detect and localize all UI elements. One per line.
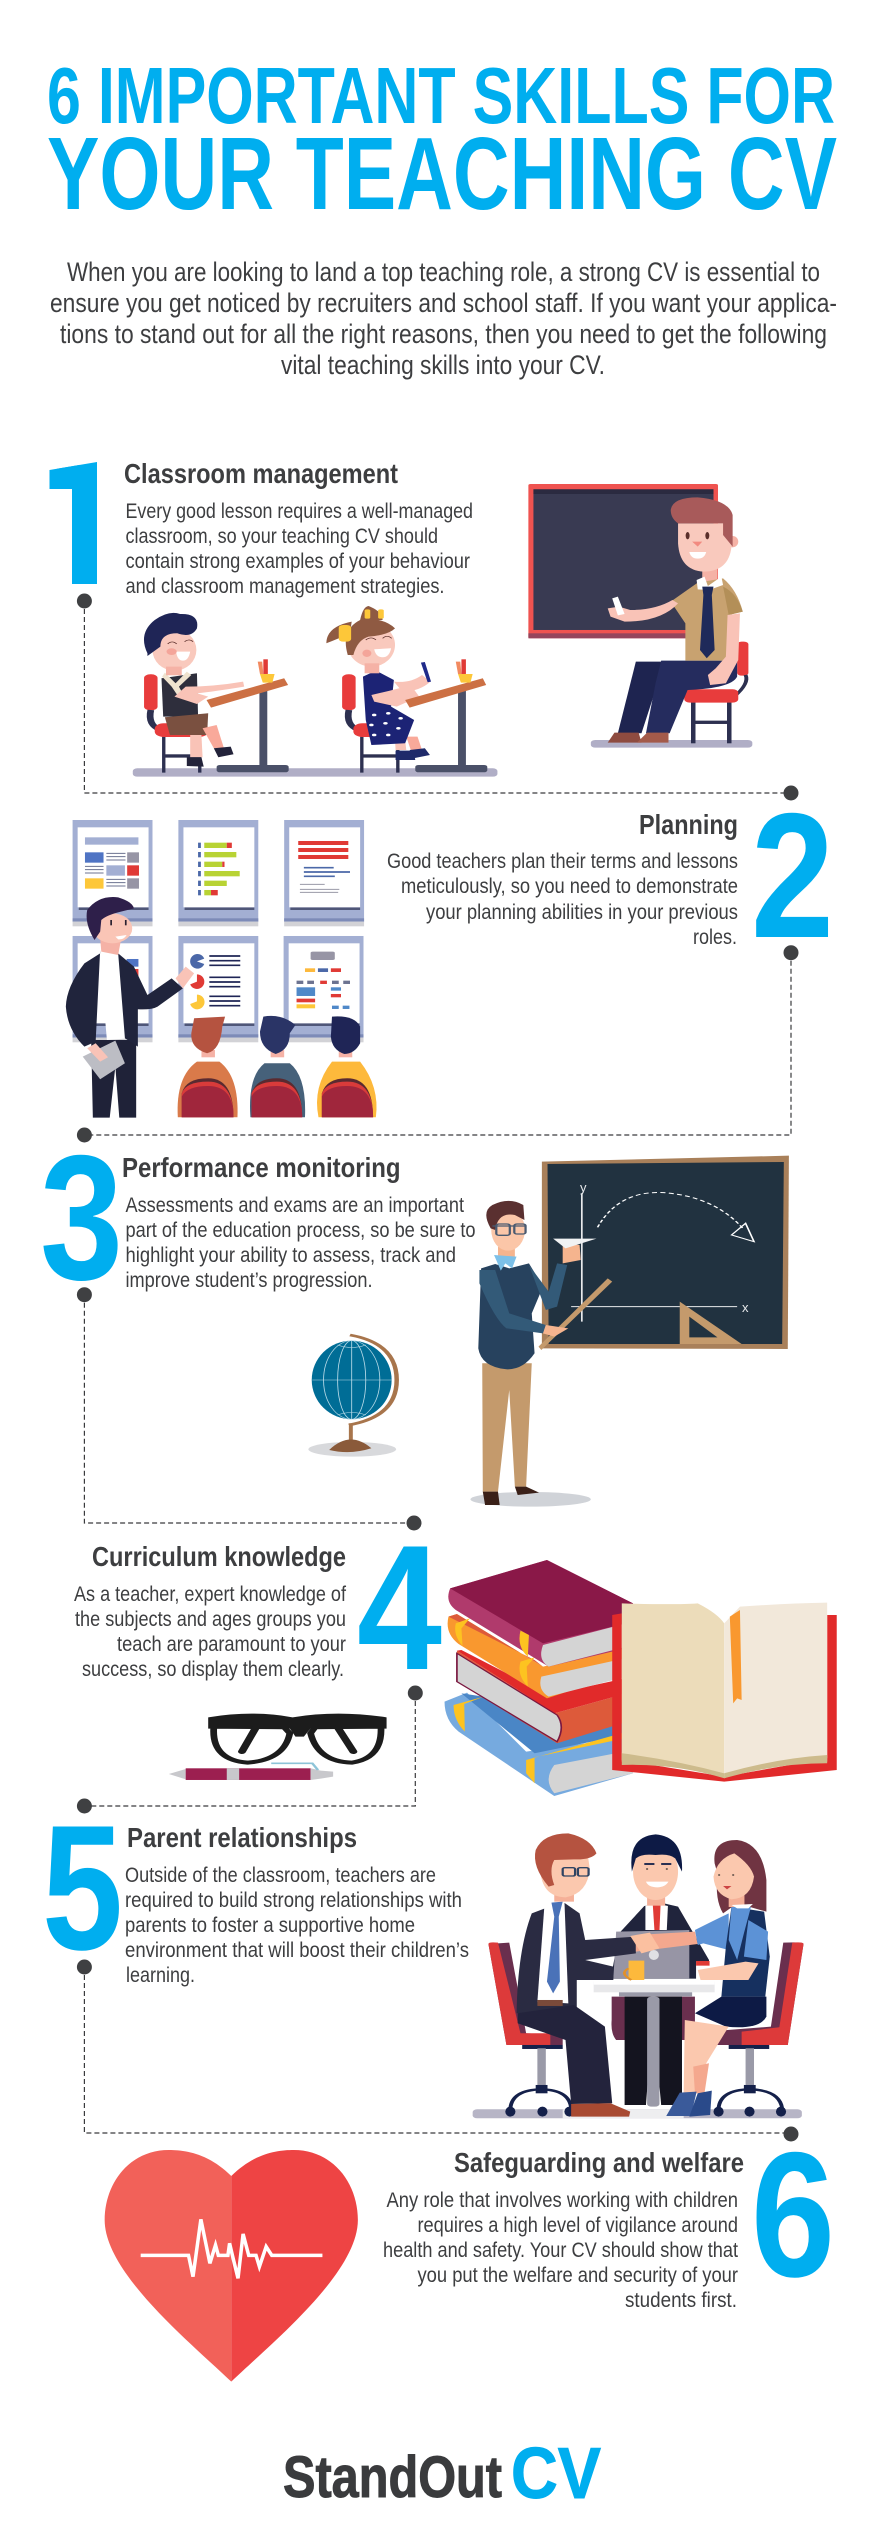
heading: curriculum knowledge: Curriculum knowledge xyxy=(92,1541,346,1572)
heading: planning: Planning xyxy=(639,809,738,840)
body text: curriculum knowledge: teach are paramount to your xyxy=(117,1633,346,1656)
body text: curriculum knowledge: success, so display them clearly. xyxy=(82,1658,344,1681)
intro paragraph xyxy=(50,257,837,380)
panel: safeguarding and welfare xyxy=(105,2115,835,2382)
number 1 xyxy=(50,462,97,584)
connector: step 5 to step 6 xyxy=(77,1960,798,2142)
logo: StandOut CV: CV xyxy=(511,2434,601,2514)
number 5: 5 xyxy=(42,1788,123,1987)
number 4: 4 xyxy=(357,1508,442,1707)
body text: parent relationships: Outside of the classroom, teachers are xyxy=(125,1864,436,1887)
connector: step 1 to step 2 xyxy=(77,594,798,800)
body text: classroom management: classroom, so your teaching CV should xyxy=(126,525,438,548)
logo: StandOut CV: StandOut xyxy=(283,2445,502,2510)
number 2: 2 xyxy=(751,776,834,975)
body text: safeguarding and welfare: students first. xyxy=(625,2289,737,2312)
body text: safeguarding and welfare: health and safety. Your CV should show that xyxy=(383,2239,738,2262)
connector: step 2 to step 3 xyxy=(77,945,798,1142)
illustration: glasses and pen xyxy=(169,1714,387,1780)
heading: parent relationships: Parent relationships xyxy=(127,1822,357,1853)
number 6: 6 xyxy=(751,2115,835,2314)
body text: classroom management: and classroom management strategies. xyxy=(126,575,444,598)
panel: planning xyxy=(66,776,834,1142)
body text: classroom management xyxy=(126,500,473,598)
body text: safeguarding and welfare: requires a high level of vigilance around xyxy=(418,2214,738,2237)
body text: planning: your planning abilities in your previous xyxy=(426,901,738,924)
illustration: teacher and parents meeting at a table xyxy=(473,1833,804,2118)
panel: performance monitoring xyxy=(40,1118,789,1530)
axis label y: y xyxy=(580,1180,587,1195)
body text: performance monitoring: highlight your ability to assess, track and xyxy=(126,1244,456,1267)
illustration: two pupils at desks xyxy=(133,606,497,777)
body text: performance monitoring: improve student’s progression. xyxy=(126,1269,372,1292)
body text: parent relationships: required to build strong relationships with xyxy=(125,1889,462,1912)
axis label x: x xyxy=(742,1300,749,1315)
title xyxy=(47,51,837,231)
panel: parent relationships xyxy=(42,1788,804,2142)
body text: safeguarding and welfare xyxy=(383,2189,738,2312)
illustration: teacher at chalkboard with axes xyxy=(308,1156,789,1507)
number 3: 3 xyxy=(40,1118,123,1317)
body text: parent relationships: environment that will boost their children’s xyxy=(125,1939,469,1962)
illustration: teacher at blackboard xyxy=(528,484,752,748)
number 1: 1 xyxy=(36,423,102,622)
body text: planning: roles. xyxy=(693,926,737,949)
body text: performance monitoring xyxy=(126,1194,476,1292)
body text: performance monitoring: Assessments and exams are an important xyxy=(126,1194,464,1217)
logo: StandOut CV xyxy=(283,2434,601,2514)
body text: parent relationships: parents to foster a supportive home xyxy=(125,1914,415,1937)
body text: planning xyxy=(387,850,738,949)
body text: safeguarding and welfare: Any role that involves working with children xyxy=(386,2189,738,2212)
body text: curriculum knowledge: As a teacher, expert knowledge of xyxy=(74,1583,346,1606)
connector: step 3 to step 4 xyxy=(77,1287,422,1530)
panel: classroom management xyxy=(36,423,798,800)
body text: performance monitoring: part of the education process, so be sure to xyxy=(126,1219,476,1242)
body text: parent relationships: learning. xyxy=(126,1964,195,1987)
icon: heart with heartbeat line xyxy=(105,2150,358,2382)
intro paragraph: vital teaching skills into your CV. xyxy=(281,350,605,380)
connector: step 4 to step 5 xyxy=(77,1686,423,1814)
panel: curriculum knowledge xyxy=(74,1508,837,1814)
heading: safeguarding and welfare: Safeguarding and welfare xyxy=(454,2147,744,2178)
heading: performance monitoring: Performance monitoring xyxy=(122,1152,401,1183)
body text: classroom management: Every good lesson requires a well-managed xyxy=(126,500,473,523)
body text: curriculum knowledge xyxy=(74,1583,346,1681)
heading: classroom management: Classroom management xyxy=(124,458,398,489)
body text: safeguarding and welfare: you put the welfare and security of your xyxy=(418,2264,738,2287)
illustration: presenter and planning boards with audience xyxy=(66,820,377,1118)
body text: planning: meticulously, so you need to demonstrate xyxy=(401,875,738,898)
body text: curriculum knowledge: the subjects and ages groups you xyxy=(75,1608,346,1631)
body text: classroom management: contain strong examples of your behaviour xyxy=(126,550,470,573)
illustration: stack of books and open book xyxy=(445,1560,837,1796)
body text: planning: Good teachers plan their terms and lessons xyxy=(387,850,738,873)
body text: parent relationships xyxy=(125,1864,469,1987)
